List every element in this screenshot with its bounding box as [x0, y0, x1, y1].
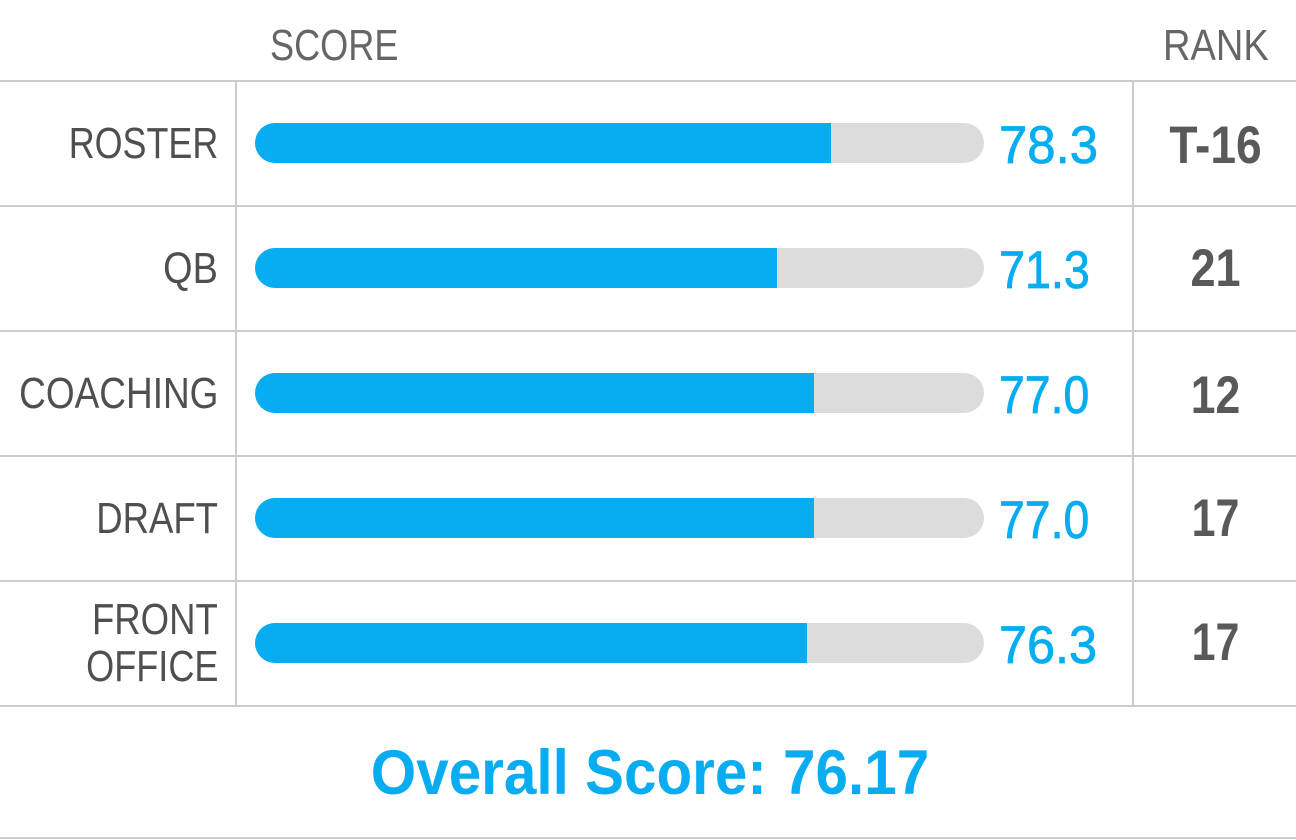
label: front office: OFFICE — [86, 643, 218, 691]
header: score: SCORE — [270, 22, 398, 70]
overall score: Overall Score: 76.17 — [371, 738, 929, 808]
label: front office: FRONT — [92, 596, 218, 644]
rank: coaching: 12 — [1191, 366, 1240, 425]
bar: coaching — [255, 373, 984, 413]
value: qb score: 71.3 — [999, 241, 1090, 300]
rank: front office: 17 — [1192, 613, 1239, 672]
value: coaching score: 77.0 — [999, 366, 1089, 425]
value: roster score: 78.3 — [999, 116, 1098, 175]
rank: draft: 17 — [1192, 489, 1239, 548]
header: rank: RANK — [1163, 22, 1269, 70]
bar: qb — [255, 248, 984, 288]
bar: roster — [255, 123, 984, 163]
label: front office — [86, 596, 218, 691]
bar: draft — [255, 498, 984, 538]
label: draft: DRAFT — [96, 495, 218, 543]
bar: front office — [255, 623, 984, 663]
label: coaching: COACHING — [19, 370, 218, 418]
rank: qb: 21 — [1190, 239, 1241, 298]
label: roster: ROSTER — [68, 120, 218, 168]
rank: roster: T-16 — [1169, 116, 1262, 175]
value: draft score: 77.0 — [999, 491, 1089, 550]
value: front office score: 76.3 — [999, 616, 1097, 675]
label: qb: QB — [163, 245, 218, 293]
